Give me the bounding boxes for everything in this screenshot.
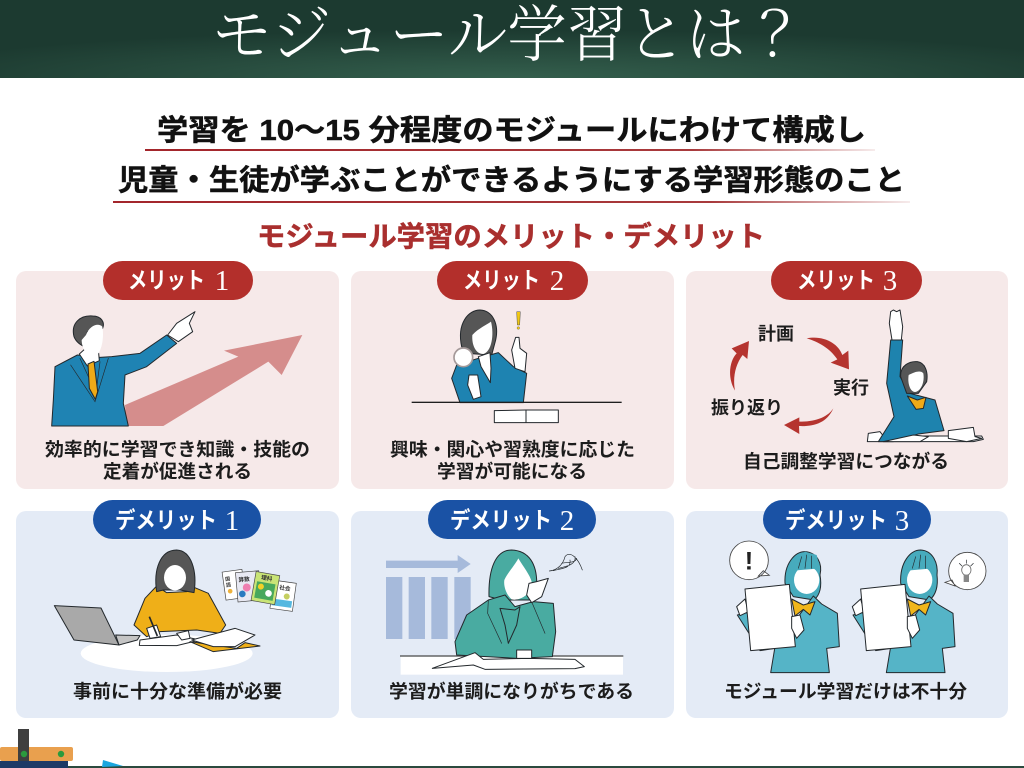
section heading: モジュール学習のメリット・デメリット [257,220,765,252]
panel: merit 1 [16,261,339,489]
illustration: student with exclamation bubble [730,541,839,673]
caption: 効率的に学習でき知識・技能の [45,439,310,460]
caption: 学習が単調になりがちである [389,681,634,702]
badge: merit 2: メリット [463,267,540,293]
diagram: plan-do-review cycle: 計画 [758,324,794,344]
badge: demerit 3 [763,500,931,539]
badge: demerit 1: デメリット [115,507,217,533]
illustration: student with light-bulb bubble [852,550,986,673]
caption: 自己調整学習につながる [743,451,949,472]
badge: merit 2: 2 [550,265,564,297]
caption [390,439,635,482]
diagram: plan-do-review cycle: 振り返り [711,398,783,418]
badge: merit 3: メリット [797,267,875,293]
caption: 学習が可能になる [437,461,587,482]
header band: title [0,0,1024,78]
diagram: plan-do-review cycle [711,324,869,434]
panel: merit 3 [686,261,1008,489]
caption: モジュール学習だけは不十分 [724,681,967,702]
caption: 興味・関心や習熟度に応じた [390,439,635,460]
illustration: woman with magnifier and book [412,310,622,423]
icon: textbook covers [222,569,296,611]
panel: merit 2 [351,261,674,489]
badge: merit 2 [437,261,588,300]
badge: demerit 2: 2 [560,505,574,537]
badge: demerit 2 [428,500,596,539]
illustration: student with exclamation bubble: ! [745,547,753,575]
badge: demerit 1: 1 [225,505,239,537]
icon: textbook covers: 社会 [279,583,291,593]
illustration: man pointing at rising arrow [52,312,302,426]
definition text: 学習を 10〜15 分程度のモジュールにわけて構成し [157,114,866,147]
illustration: student raising hand [867,310,983,442]
badge: demerit 3: 3 [895,505,909,537]
icon: textbook covers: 語 [226,581,231,589]
panel: demerit 3 [686,500,1008,718]
definition text [113,114,910,203]
diagram: plan-do-review cycle: 実行 [833,378,869,398]
badge: merit 1: メリット [128,267,205,293]
badge: demerit 1 [93,500,261,539]
badge: merit 1: 1 [215,265,229,297]
illustration: woman preparing at desk with laptop and textbooks [54,550,296,672]
caption: 事前に十分な準備が必要 [73,681,282,702]
badge: merit 3: 3 [883,265,897,297]
icon: textbook covers: 理科 [261,573,273,583]
badge: merit 1 [103,261,253,300]
illustration: bored student with repeating module bars [386,550,623,675]
footer band with desk decoration [0,729,1024,768]
badge: merit 3 [771,261,922,300]
caption [45,439,310,482]
icon: textbook covers: 算数 [238,575,250,584]
definition text: 児童・生徒が学ぶことができるようにする学習形態のこと [118,163,905,197]
badge: demerit 3: デメリット [785,507,887,533]
panel: demerit 2 [351,500,674,718]
badge: demerit 2: デメリット [450,507,552,533]
panel: demerit 1 [16,500,339,718]
icon: textbook covers: 国 [225,575,231,583]
caption: 定着が促進される [103,461,252,482]
